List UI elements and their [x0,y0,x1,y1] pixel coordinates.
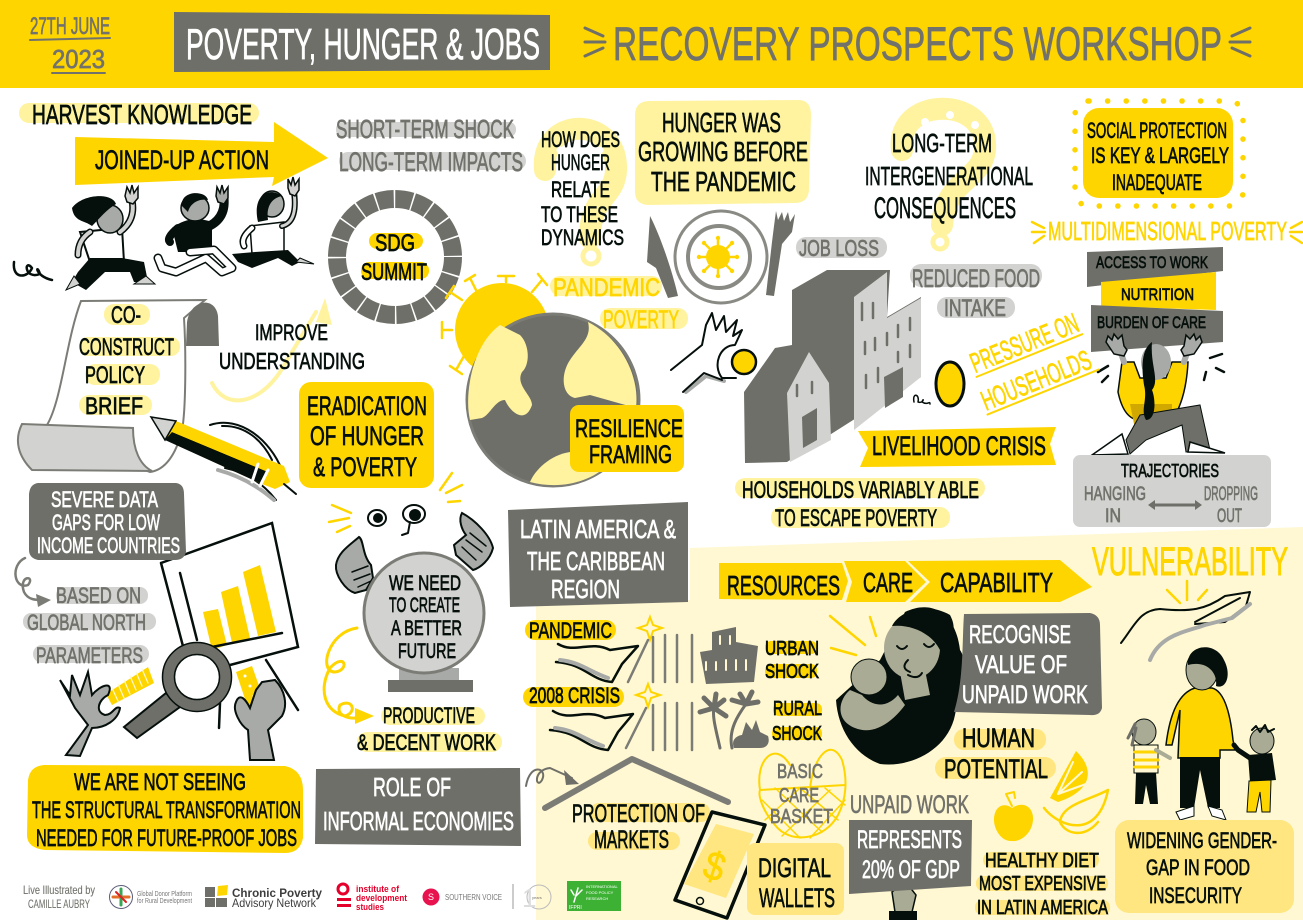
healthy diet text: IN LATIN AMERICA [977,897,1108,919]
left hand [60,672,120,756]
callout: severe data gaps: INCOME COUNTRIES [37,533,180,558]
pressure on households [962,307,1099,416]
reduced food intake: INTAKE [944,295,1006,322]
icon: palm trees and bush [700,692,769,748]
illustration: hand with pencil [151,417,296,500]
person three [232,177,314,268]
callout: represents 20% of GDP: 20% OF GDP [862,856,960,884]
illustration: virus sun [442,274,549,377]
text: how does hunger relate: HUNGER [551,150,610,175]
rural shock [772,698,822,745]
footer: logo institute of development studies: studies [356,902,384,912]
callout: widening gender gap [1115,820,1294,913]
illustration: kneeling woman carrying burdens [1092,334,1225,455]
illustration: crystal ball with face and hands: A BETTER [391,617,462,640]
callout: hunger was growing [635,100,811,205]
illustration: mother and two children [1128,647,1276,820]
callout: latin america [508,502,688,607]
footer: logo chronic poverty advisory network: Advisory Network [232,896,317,910]
callout: resilience framing [570,405,684,472]
footer: logo IFPRI: INTERNATIONAL [586,884,618,889]
date [30,13,110,74]
reduced food intake: REDUCED FOOD [912,265,1040,293]
footer: logo ten years [513,883,551,913]
co-construct policy brief: POLICY [85,362,145,389]
footer: logo institute of development studies [337,884,407,912]
callout: role of informal economies: ROLE OF [373,772,451,802]
pandemic shock row [525,617,692,682]
banner: resources care capability [719,560,1092,602]
panel: trajectories [1073,455,1271,527]
callout: latin america: REGION [551,574,620,604]
footer: illustrator credit [23,883,95,911]
human potential: HUMAN [962,723,1035,753]
callout: severe data gaps: GAPS FOR LOW [52,510,160,535]
illustration: three running people [66,177,314,290]
icon: fist holding sign [889,881,917,920]
footer: logo global donor platform: Global Donor Platform [137,891,192,898]
callout: structural transformation: THE STRUCTURAL TRANSFORMATION [32,797,301,824]
callout: digital wallets: DIGITAL [758,853,831,883]
callout: severe data gaps [29,483,186,560]
icon: urban skyline [700,627,758,684]
hands [336,537,373,593]
callout: widening gender gap: GAP IN FOOD [1146,855,1250,880]
arrow: yellow loop to productive work [324,628,374,724]
pandemic poverty [550,274,688,334]
icon: basket [759,750,845,838]
short-term / long-term: SHORT-TERM SHOCK [336,114,514,144]
short-term / long-term [336,114,526,177]
icon: SDG summit ring: SDG [375,230,415,257]
pandemic poverty: POVERTY [603,306,679,334]
illustration: crystal ball with face and hands: TO CREATE [389,594,460,617]
illustration: crystal ball with face and hands: WE NEED [389,572,461,595]
icon: SDG summit ring [337,199,453,315]
callout: recognise value of unpaid work: VALUE OF [975,651,1067,679]
productive and decent work: & DECENT WORK [357,730,496,755]
illustration: crystal ball with face and hands: FUTURE [398,640,456,663]
arrow: improve understanding: UNDERSTANDING [219,348,365,374]
footer: logo southern voice: S [428,892,434,902]
date: 2023 [52,44,105,74]
ball [364,553,484,673]
footer: logo institute of development studies: development [356,893,407,903]
illustration: policy brief scroll [18,300,219,472]
yellow strip [106,667,154,705]
girl [1128,719,1170,804]
2008 crisis shock row [523,683,692,750]
based on global north parameters: GLOBAL NORTH [27,610,146,635]
base [399,668,459,680]
pandemic shock row: PANDEMIC [529,618,612,643]
rays [329,473,462,532]
callout: represents 20% of GDP: REPRESENTS [857,826,962,854]
callout: social protection: INADEQUATE [1112,170,1202,195]
harvest knowledge: HARVEST KNOWLEDGE [32,99,252,130]
arrow: improve understanding [212,298,365,400]
households variably able: HOUSEHOLDS VARIABLY ABLE [742,477,979,504]
footer: illustrator credit: Live Illustrated by [23,883,95,897]
co-construct policy brief [79,302,180,420]
text: long-term intergenerational consequences: CONSEQUENCES [874,192,1016,225]
rural shock: SHOCK [772,723,822,745]
productive and decent work: PRODUCTIVE [383,703,475,728]
text: long-term intergenerational consequences: INTERGENERATIONAL [865,161,1033,191]
healthy diet text: MOST EXPENSIVE [979,873,1106,895]
callout: eradication of hunger and poverty: & POVERTY [313,452,417,482]
banner: livelihood crisis: LIVELIHOOD CRISIS [872,431,1046,461]
text: how does hunger relate: TO THESE [541,202,618,227]
callout: hunger was growing: GROWING BEFORE [638,136,808,167]
icon: basket: BASKET [770,806,833,828]
healthy diet text: HEALTHY DIET [985,850,1099,872]
text: how does hunger relate [541,127,624,250]
callout: eradication of hunger and poverty: ERADICATION [307,391,427,421]
callout: recognise value of unpaid work: RECOGNISE [969,621,1071,649]
arrow: curly to roof [526,768,579,786]
illustration: houses and buildings [744,270,921,463]
callout: structural transformation: WE ARE NOT SEEING [74,769,246,796]
panel: trajectories: DROPPING [1204,484,1258,505]
illustration: chart board [161,523,298,728]
callout: social protection: IS KEY & LARGELY [1091,143,1229,168]
based on global north parameters [15,558,156,668]
person one [66,185,155,290]
text: how does hunger relate: HOW DOES [541,127,620,152]
human potential: POTENTIAL [944,754,1048,784]
protection of markets: MARKETS [594,826,669,854]
households variably able: TO ESCAPE POVERTY [775,505,937,532]
arrow: joined-up action [75,122,328,186]
urban shock [765,638,819,683]
2008 crisis shock row: 2008 CRISIS [529,683,620,708]
panel: cream vulnerability background [536,527,1303,920]
date: 27TH JUNE [30,13,110,40]
icon: question mark one [545,129,616,264]
footer: illustrator credit: CAMILLE AUBRY [28,897,90,911]
footer: logo IFPRI [567,881,621,911]
human potential [935,723,1056,784]
callout: resilience framing: FRAMING [589,441,672,469]
yellow card [236,666,264,708]
illustration: crystal ball with face and hands [329,473,493,692]
pressure on households: PRESSURE ON [966,307,1083,379]
text: long-term intergenerational consequences: LONG-TERM [892,128,992,158]
based on global north parameters: PARAMETERS [36,643,143,668]
callout: recognise value of unpaid work: UNPAID WORK [962,681,1088,709]
callout: eradication of hunger and poverty: OF HUNGER [310,421,424,451]
icon: phone: $ [698,843,731,891]
footer: logo southern voice [422,888,502,906]
callout: social protection [1075,101,1243,206]
unpaid work label: UNPAID WORK [850,791,969,819]
stack: burdens: ACCESS TO WORK [1096,253,1208,272]
urban shock: SHOCK [765,661,819,683]
arrow: improve understanding: IMPROVE [255,320,328,345]
panel: trajectories: OUT [1217,506,1242,527]
pandemic poverty: PANDEMIC [553,274,660,302]
panel: trajectories: HANGING [1084,484,1146,505]
panel: trajectories: TRAJECTORIES [1121,461,1219,481]
icon: SDG summit ring: SUMMIT [361,259,427,286]
callout: hunger was growing: HUNGER WAS [662,107,781,138]
title: POVERTY, HUNGER & JOBS [186,20,540,69]
footer: logo southern voice: SOUTHERN VOICE [445,893,502,902]
short-term / long-term: LONG-TERM IMPACTS [339,147,523,177]
footer: logo ten years: 1 [522,883,536,913]
icon: hand with coin [671,313,756,392]
icon: plate, knife and fork [647,211,795,303]
urban shock: URBAN [765,638,819,660]
callout: role of informal economies: INFORMAL ECONOMIES [323,806,514,836]
banner: resources care capability: RESOURCES [727,570,840,601]
callout: hunger was growing: THE PANDEMIC [651,166,796,197]
title [174,12,550,72]
footer: logo ten years: years [532,895,542,900]
banner: resources care capability: CARE [863,567,913,598]
icon: hand protecting [1121,581,1250,660]
protection of markets [572,800,710,854]
households variably able [735,477,985,532]
callout: resilience framing: RESILIENCE [575,415,683,443]
icon: roof [545,759,728,808]
right hand [235,680,285,760]
icon: question mark two [902,109,985,249]
banner: livelihood crisis [858,427,1056,467]
callout: eradication of hunger and poverty [299,382,434,488]
eyes [368,510,386,526]
panel: trajectories: IN [1105,506,1121,527]
text: long-term intergenerational consequences [865,128,1033,225]
callout: structural transformation [27,765,303,853]
callout: severe data gaps: SEVERE DATA [51,487,158,512]
pressure on households: HOUSEHOLDS [977,344,1096,416]
callout: latin america: LATIN AMERICA & [520,514,676,544]
icon: basket: BASIC [777,761,823,783]
stack: burdens: NUTRITION [1121,285,1194,304]
reduced food intake [910,264,1042,322]
job loss: JOB LOSS [799,235,879,261]
icon: lemon, leaf and apple [994,751,1108,841]
harvest knowledge [19,99,259,130]
callout: represents 20% of GDP [849,820,972,920]
rural shock: RURAL [773,698,822,720]
callout: role of informal economies [315,768,521,846]
illustration: magnifier and hands [60,642,285,760]
callout: widening gender gap: INSECURITY [1149,883,1242,908]
callout: digital wallets [747,843,844,915]
protection of markets: PROTECTION OF [572,800,705,828]
icon: coin [914,362,964,406]
footer: logo IFPRI: RESEARCH [586,896,608,901]
healthy diet text [975,850,1110,919]
icon: phone [675,812,765,918]
callout: recognise value of unpaid work [954,613,1102,715]
co-construct policy brief: BRIEF [85,393,143,420]
illustration: mother and baby [830,607,964,765]
based on global north parameters: BASED ON [56,583,141,608]
productive and decent work [357,703,502,755]
footer: logo chronic poverty advisory network [205,885,322,910]
banner: resources care capability: CAPABILITY [940,567,1053,598]
arrow: joined-up action: JOINED-UP ACTION [95,145,269,175]
header band [0,0,1303,88]
boy [1234,725,1276,812]
co-construct policy brief: CONSTRUCT [79,334,174,361]
mother [1166,647,1235,820]
footer: logo IFPRI: IFPRI [569,905,582,911]
illustration: globe [467,314,639,486]
footer: logo global donor platform [110,886,192,908]
icon: swirl [14,262,52,280]
callout: digital wallets: WALLETS [759,883,835,913]
callout: structural transformation: NEEDED FOR FUTURE-PROOF JOBS [36,825,297,852]
footer: logo IFPRI: FOOD POLICY [586,890,614,895]
co-construct policy brief: CO- [111,302,141,329]
person two [158,185,232,272]
icon: basket: CARE [779,785,819,807]
callout: latin america: THE CARIBBEAN [527,546,665,576]
footer: logo chronic poverty advisory network: Chronic Poverty [232,886,322,900]
text: how does hunger relate: RELATE [551,177,610,202]
stack: burdens: BURDEN OF CARE [1097,313,1206,332]
text: how does hunger relate: DYNAMICS [541,225,624,250]
footer: logo institute of development studies: institute of [356,884,400,894]
stack: burdens [1087,247,1223,352]
footer: logo global donor platform: for Rural Development [137,898,192,905]
